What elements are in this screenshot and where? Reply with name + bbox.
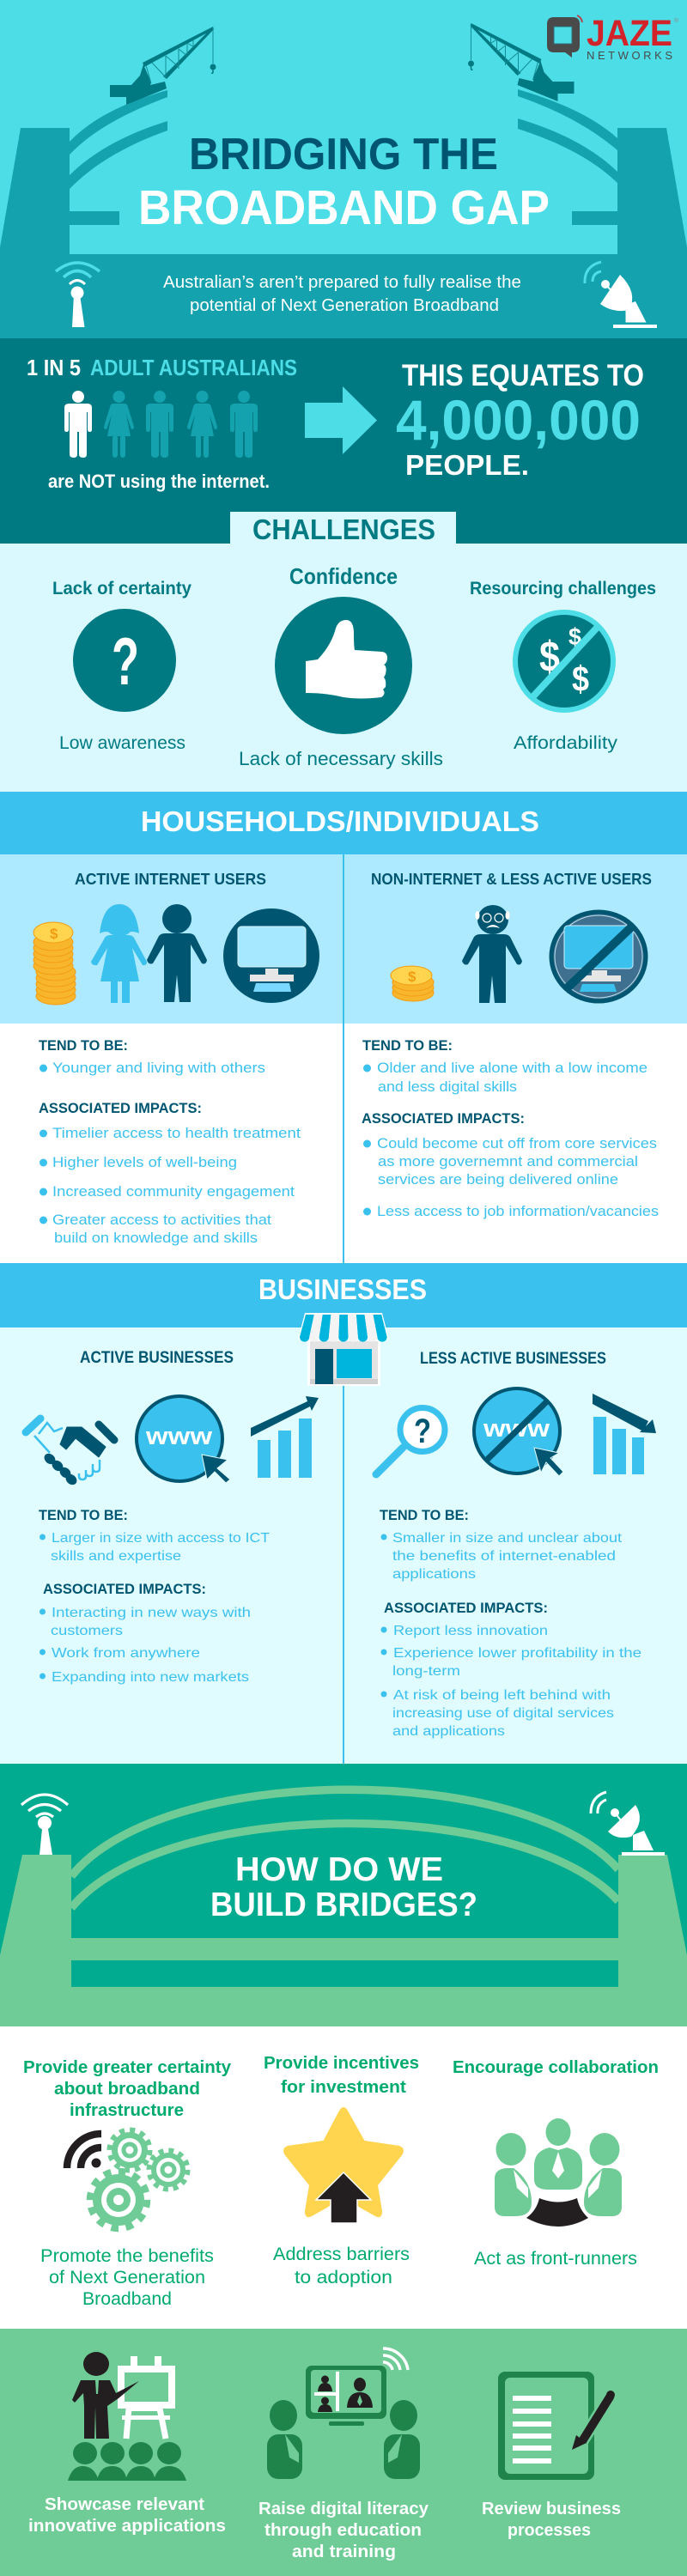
icon: www cursor <box>137 1396 230 1483</box>
title: BRIDGING THE <box>189 130 498 179</box>
icon: man <box>147 904 207 1002</box>
heading: provide incentives: Provide incentives <box>264 2054 419 2073</box>
logo: Jaze Networks: ® <box>674 17 679 24</box>
text block: active businesses: skills and expertise <box>51 1549 181 1564</box>
caption: showcase applications <box>28 2495 226 2536</box>
stat: 4,000,000 people: 4,000,000 <box>396 388 641 452</box>
caption: promote the benefits: of Next Generation <box>49 2268 205 2287</box>
text block: non-internet users: services are being delivered online <box>378 1172 618 1188</box>
logo: Jaze Networks <box>547 13 679 62</box>
heading: provide greater certainty: Provide greater certainty <box>23 2058 232 2077</box>
challenge: lack of certainty: Low awareness <box>59 733 185 753</box>
challenge: resourcing: Resourcing challenges <box>470 579 656 598</box>
icon: notepad and pencil <box>498 2372 615 2480</box>
icon: wifi tower <box>21 1795 68 1855</box>
icon: satellite dish <box>585 262 657 328</box>
text block: active internet users: Higher levels of well-being <box>52 1155 237 1170</box>
heading: provide greater certainty: about broadband <box>54 2080 200 2099</box>
caption: review business processes: processes <box>508 2521 591 2540</box>
logo: Jaze Networks: NETWORKS <box>587 49 672 62</box>
right bridge tower <box>617 128 687 254</box>
challenge: resourcing: $ <box>568 623 581 650</box>
text block: less active businesses: long-term <box>392 1664 460 1679</box>
icon: wifi and gears <box>67 2129 187 2229</box>
icon: magnifying glass: ? <box>414 1413 431 1450</box>
heading: active businesses: ACTIVE BUSINESSES <box>80 1349 234 1367</box>
text block: less active businesses: the benefits of internet-enabled <box>392 1549 616 1564</box>
heading: businesses: BUSINESSES <box>258 1273 427 1305</box>
text block: active internet users: Increased community engagement <box>52 1184 295 1200</box>
icon: handshake <box>26 1419 114 1487</box>
text block: non-internet users <box>362 1038 659 1219</box>
icon: satellite dish <box>591 1792 665 1856</box>
icon: tall coin stack <box>33 922 76 1005</box>
icon: shop front <box>298 1313 389 1386</box>
left arches <box>70 90 167 225</box>
caption: address barriers: to adoption <box>295 2268 392 2287</box>
right crane <box>468 23 574 101</box>
subtitle: Australian’s aren’t prepared to fully realise the <box>163 273 521 292</box>
icon: small coin stack <box>391 966 434 1001</box>
stat heading: ADULT AUSTRALIANS <box>90 355 297 380</box>
icon: wifi tower <box>56 263 100 327</box>
icon: collaboration team <box>495 2118 622 2227</box>
icon: magnifying glass <box>376 1408 445 1474</box>
text block: non-internet users: as more governemnt and commercial <box>378 1154 638 1170</box>
challenge: lack of certainty: ? <box>112 623 139 699</box>
caption: address barriers: Address barriers <box>273 2245 410 2264</box>
text block: active businesses: Interacting in new ways with <box>52 1606 251 1620</box>
panel: white recommendations <box>0 2026 687 2329</box>
challenge: lack of certainty: Lack of certainty <box>52 579 192 598</box>
caption: raise digital literacy: Raise digital literacy <box>258 2500 429 2518</box>
panel: challenges <box>0 512 687 792</box>
heading: challenges: CHALLENGES <box>252 513 435 545</box>
subtitle <box>163 273 521 315</box>
panel: households and individuals <box>0 792 687 1263</box>
right arches <box>518 89 617 225</box>
text block: non-internet users: and less digital skills <box>378 1079 517 1095</box>
text block: active internet users <box>39 1038 301 1246</box>
stat heading: 1 IN 5 <box>27 355 81 380</box>
text block: less active businesses: At risk of being left behind with <box>393 1688 611 1703</box>
text block: active internet users: Younger and living with others <box>52 1060 265 1076</box>
challenge: confidence <box>239 563 443 769</box>
caption: act as front-runners: Act as front-runners <box>474 2249 637 2269</box>
challenge: confidence: Confidence <box>289 563 398 589</box>
caption: address barriers <box>273 2245 410 2287</box>
text block: less active businesses: and applications <box>392 1724 505 1739</box>
text block: active businesses: TEND TO BE: <box>39 1508 128 1523</box>
text block: non-internet users: ASSOCIATED IMPACTS: <box>362 1111 525 1127</box>
text block: non-internet users: Older and live alone with a low income <box>377 1060 647 1076</box>
panel: how do we build bridges <box>0 1764 687 2026</box>
text block: less active businesses: Smaller in size and unclear about <box>392 1531 623 1546</box>
arrow <box>305 386 377 454</box>
stat: 4,000,000 people: PEOPLE. <box>405 449 529 481</box>
icon: falling bar chart <box>593 1394 656 1474</box>
caption: raise digital literacy: through education <box>264 2521 422 2540</box>
heading: active internet users: ACTIVE INTERNET USERS <box>75 871 266 888</box>
text block: less active businesses: applications <box>392 1567 476 1582</box>
stat: 4,000,000 people <box>396 359 644 481</box>
text block: active businesses: Expanding into new markets <box>52 1670 249 1685</box>
caption: promote the benefits: Broadband <box>82 2289 172 2309</box>
panel: statistics <box>0 338 687 544</box>
text block: active businesses: Larger in size with access to ICT <box>52 1531 270 1546</box>
caption: showcase applications: Showcase relevant <box>45 2495 204 2514</box>
icon: crossed-out www <box>474 1388 563 1476</box>
title: BROADBAND GAP <box>138 180 550 235</box>
text block: non-internet users: TEND TO BE: <box>362 1038 453 1054</box>
left bridge tower <box>0 128 70 254</box>
icon: www cursor: www <box>145 1423 213 1450</box>
icon: small coin stack: $ <box>408 969 416 985</box>
text block: active internet users: Timelier access to health treatment <box>52 1126 301 1141</box>
text block: less active businesses: TEND TO BE: <box>380 1508 469 1523</box>
caption: review business processes: Review business <box>482 2500 621 2518</box>
caption: raise digital literacy <box>258 2500 429 2561</box>
title <box>138 130 550 235</box>
text block: active businesses: ASSOCIATED IMPACTS: <box>43 1582 206 1597</box>
title: how do we build bridges: BUILD BRIDGES? <box>210 1886 477 1923</box>
text block: less active businesses <box>380 1508 641 1739</box>
caption: showcase applications: innovative applications <box>28 2517 226 2536</box>
heading: encourage collaboration: Encourage collaboration <box>453 2058 659 2077</box>
icon: computer in circle <box>223 908 319 1003</box>
caption: review business processes <box>482 2500 621 2540</box>
challenge: resourcing: Affordability <box>514 733 618 753</box>
caption: promote the benefits: Promote the benefits <box>40 2246 214 2266</box>
icon: star and arrow <box>283 2107 404 2223</box>
text block: active internet users: build on knowledge and skills <box>54 1230 258 1246</box>
text block: active businesses: Work from anywhere <box>52 1646 200 1661</box>
text block: less active businesses: ASSOCIATED IMPACTS: <box>384 1601 548 1616</box>
icon: tall coin stack: $ <box>50 926 58 942</box>
challenge: resourcing: $ <box>539 633 560 681</box>
challenge: confidence: Lack of necessary skills <box>239 748 443 769</box>
icon: video conference <box>267 2348 420 2479</box>
left crane <box>110 27 216 105</box>
challenge: resourcing <box>470 579 656 753</box>
green bridge <box>0 1789 687 2026</box>
five people pictogram <box>64 391 258 458</box>
text block: active internet users: TEND TO BE: <box>39 1038 128 1054</box>
heading: provide incentives: for investment <box>281 2078 406 2097</box>
text block: active businesses: customers <box>51 1624 123 1638</box>
title: how do we build bridges: HOW DO WE <box>235 1851 443 1888</box>
challenge: lack of certainty <box>52 579 192 753</box>
icon: older man <box>462 905 522 1003</box>
heading: provide incentives <box>264 2054 419 2097</box>
text block: less active businesses: Experience lower profitability in the <box>393 1646 641 1661</box>
subtitle: potential of Next Generation Broadband <box>190 296 499 315</box>
text block: non-internet users: Less access to job information/vacancies <box>377 1204 659 1219</box>
caption: promote the benefits <box>40 2246 214 2309</box>
title: how do we build bridges <box>210 1851 477 1923</box>
icon: crossed-out www: www <box>483 1415 550 1443</box>
logo: Jaze Networks: JAZE <box>587 13 672 54</box>
icon: girl <box>91 904 147 1003</box>
icon: presenter at easel <box>68 2352 186 2481</box>
caption: raise digital literacy: and training <box>292 2543 396 2561</box>
text block: active internet users: Greater access to activities that <box>52 1212 271 1228</box>
text block: less active businesses: increasing use of digital services <box>392 1706 614 1721</box>
text block: less active businesses: Report less innovation <box>393 1624 548 1638</box>
heading: provide greater certainty: infrastructure <box>70 2101 184 2120</box>
heading: provide greater certainty <box>23 2058 232 2120</box>
panel: green recommendations <box>0 2329 687 2576</box>
text block: non-internet users: Could become cut off from core services <box>377 1136 657 1151</box>
stat heading <box>27 355 297 380</box>
heading: non-internet users: NON-INTERNET & LESS ACTIVE USERS <box>371 871 652 888</box>
panel: businesses <box>0 1263 687 1764</box>
icon: crossed-out computer <box>551 912 646 1001</box>
stat: 4,000,000 people: THIS EQUATES TO <box>402 359 644 392</box>
challenge: resourcing: $ <box>572 659 589 699</box>
heading: households/individuals: HOUSEHOLDS/INDIVIDUALS <box>141 805 539 837</box>
icon: rising bar chart <box>251 1396 319 1478</box>
text block: active businesses <box>39 1508 270 1685</box>
stat caption: are NOT using the internet. <box>48 471 270 492</box>
heading: less active businesses: LESS ACTIVE BUSINESSES <box>420 1350 606 1368</box>
text block: active internet users: ASSOCIATED IMPACTS: <box>39 1101 202 1116</box>
panel: header bridge <box>0 0 687 338</box>
